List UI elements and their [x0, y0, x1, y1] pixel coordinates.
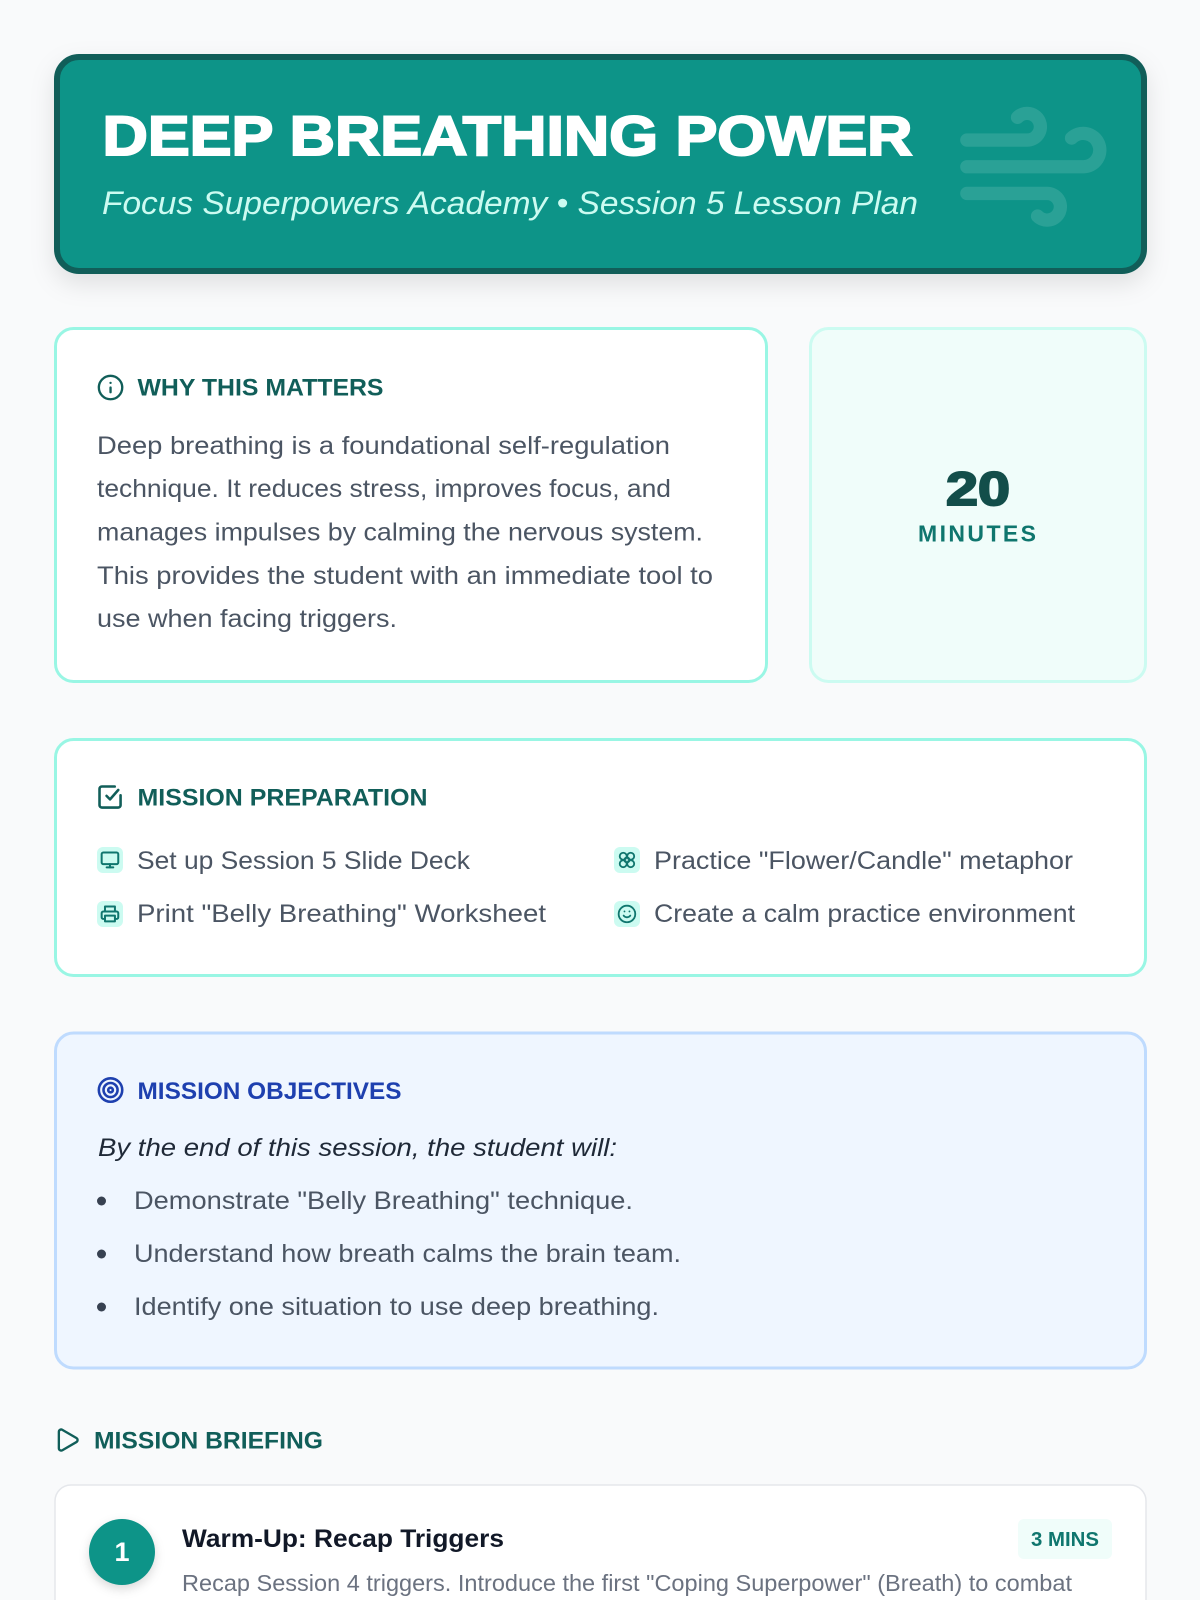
heading: mission objectives: MISSION OBJECTIVES — [138, 1078, 402, 1105]
icon: wind — [967, 113, 1100, 220]
item: worksheet: Print "Belly Breathing" Worksheet — [137, 900, 546, 928]
icon: info — [99, 376, 122, 399]
item: metaphor: Practice "Flower/Candle" metaphor — [654, 847, 1073, 875]
heading: mission preparation: MISSION PREPARATION — [138, 784, 428, 812]
step description: Recap Session 4 triggers. Introduce the first "Coping Superpower" (Breath) to combat — [182, 1570, 1073, 1596]
body text: technique. It reduces stress, improves focus, and — [97, 475, 671, 503]
icon: target — [99, 1078, 122, 1102]
objective list — [97, 1187, 681, 1321]
header banner — [57, 57, 1144, 271]
objective list: Identify one situation to use deep breathing. — [134, 1293, 659, 1321]
title: DEEP BREATHING POWER — [102, 104, 913, 167]
body text: This provides the student with an immediate tool to — [97, 562, 713, 590]
step card: warm-up — [55, 1485, 1146, 1600]
section heading: mission briefing — [59, 1428, 323, 1454]
panel: duration stat — [810, 328, 1146, 682]
panel: why this matters — [56, 328, 766, 682]
body text: Deep breathing is a foundational self-regulation — [97, 432, 670, 460]
step number — [89, 1519, 155, 1585]
objective list: Demonstrate "Belly Breathing" technique. — [134, 1187, 633, 1215]
intro sentence: By the end of this session, the student will: — [98, 1134, 617, 1162]
body text: use when facing triggers. — [97, 605, 397, 633]
body text: manages impulses by calming the nervous system. — [97, 518, 703, 546]
time badge — [1018, 1519, 1112, 1559]
icon: play — [59, 1430, 78, 1451]
objective list: Understand how breath calms the brain team. — [134, 1240, 681, 1268]
item: calm environment: Create a calm practice environment — [654, 900, 1075, 928]
subtitle: Focus Superpowers Academy • Session 5 Lesson Plan — [102, 185, 918, 221]
number: 20: 20 — [946, 462, 1010, 515]
heading: why this matters: WHY THIS MATTERS — [138, 374, 384, 402]
item: slide deck: Set up Session 5 Slide Deck — [137, 847, 471, 875]
heading text: MISSION BRIEFING — [94, 1428, 323, 1454]
icon: square check — [100, 787, 121, 808]
time badge: 3 MINS — [1031, 1529, 1099, 1551]
label: minutes: MINUTES — [918, 520, 1036, 546]
body text — [97, 432, 713, 633]
panel: mission preparation — [56, 740, 1146, 976]
step title: Warm-Up: Recap Triggers — [182, 1525, 504, 1553]
step number: 1 — [114, 1537, 130, 1567]
panel: mission objectives — [56, 1033, 1146, 1368]
